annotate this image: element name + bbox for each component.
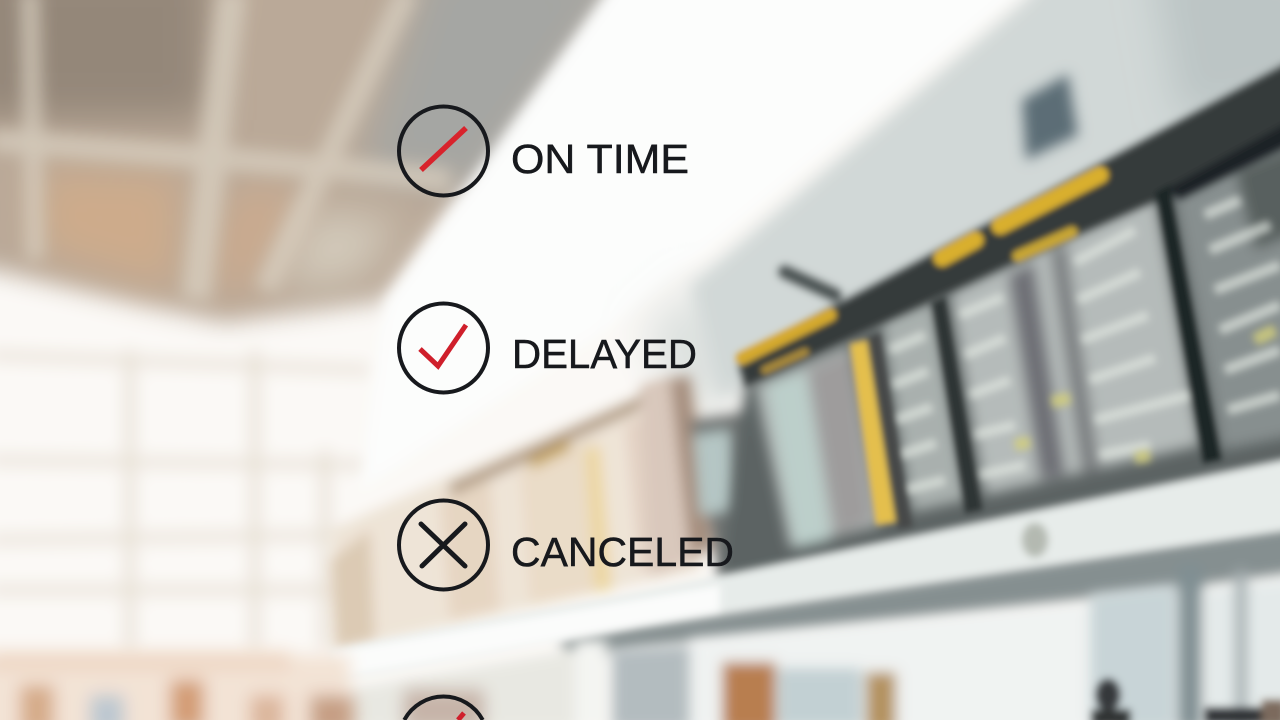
dark header band — [738, 45, 1280, 388]
pillars — [868, 185, 1222, 530]
board rows — [890, 200, 1280, 490]
status item: canceled — [399, 500, 734, 590]
status item: on time — [399, 106, 689, 196]
status item: partially visible fourth icon — [404, 697, 483, 720]
white ledge and shadow — [330, 452, 1280, 680]
screen 4 — [1172, 125, 1280, 450]
lower level — [345, 565, 1280, 720]
status item: delayed — [399, 304, 697, 392]
screen 1 — [755, 345, 880, 548]
wall sign — [1022, 74, 1078, 160]
icon: circle with red slash — [399, 106, 488, 196]
people silhouettes — [1092, 679, 1280, 720]
grey wall — [640, 280, 750, 425]
left side screen frame — [640, 375, 780, 578]
label: canceled: CANCELED — [511, 529, 734, 575]
screen 3 — [950, 195, 1200, 495]
window wall with mullions — [0, 350, 370, 650]
label: on time: ON TIME — [511, 136, 689, 182]
screen 2 — [881, 300, 966, 512]
icon: circle with black cross — [399, 500, 488, 590]
crowd on the left — [0, 650, 484, 720]
yellow signs — [742, 175, 1100, 525]
icon: circle with red check mark — [399, 304, 488, 392]
lower mid-wall panels — [330, 370, 700, 650]
label: delayed: DELAYED — [512, 331, 697, 377]
departure boards — [720, 110, 1280, 585]
white wall — [360, 0, 1060, 490]
ceiling — [0, 0, 640, 322]
ceiling grid beams — [0, 0, 450, 300]
